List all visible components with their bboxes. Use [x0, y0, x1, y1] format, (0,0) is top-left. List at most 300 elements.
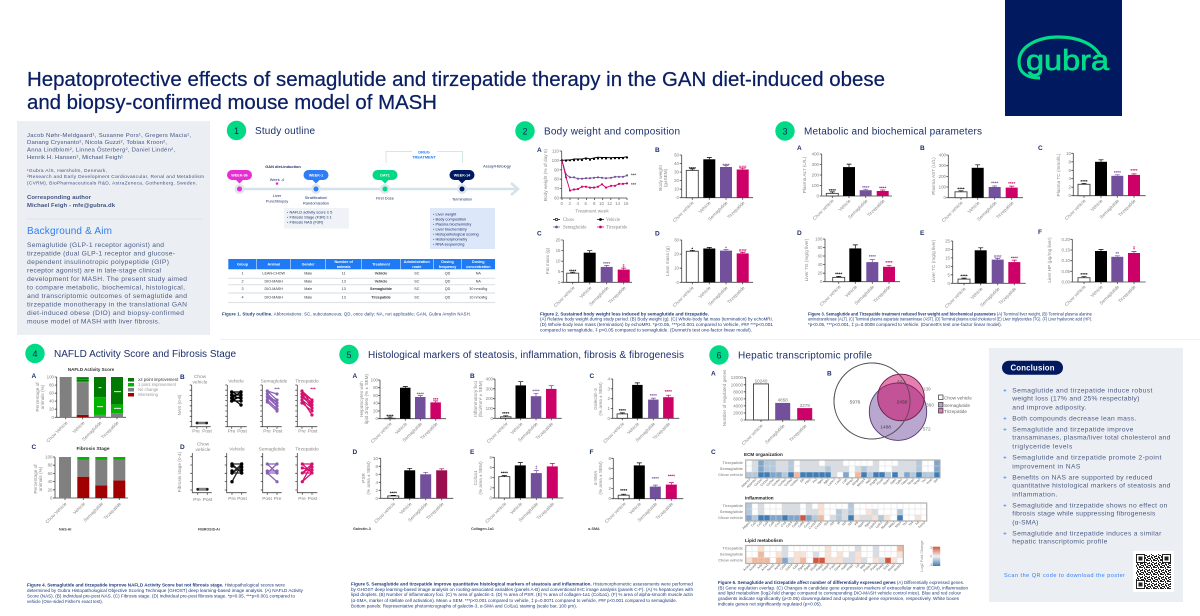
gene labels: Il6 — [836, 520, 841, 526]
table: study groups: Vehicle — [375, 280, 387, 284]
affiliations: ²Research and Early Development Cardiovascular, Renal and Metabolism — [27, 174, 204, 180]
chart 2A: relative body weight line chart: 16 — [624, 201, 629, 206]
logo: gubra — [1005, 0, 1122, 116]
text: background: mouse model of MASH with liver fibrosis. — [27, 318, 160, 326]
badge 2: 2 — [522, 126, 528, 136]
heading: NAFLD: NAFLD Activity Score and Fibrosis Stage — [54, 349, 236, 360]
chart 2C: fat mass: Semaglutide — [588, 285, 610, 307]
chart 3C: plasma TC: 4 — [1069, 176, 1072, 181]
gene labels: Myd88 — [880, 520, 890, 530]
authors: Jacob Nøhr-Meldgaard¹, Susanne Pors¹, Gregers Macia¹, — [27, 133, 191, 139]
chart 3A: plasma ALT: 300 — [812, 162, 820, 167]
chart 5B: inflammatory foci: **** — [532, 388, 540, 394]
chart 5C: galectin-3: Chow vehicle — [602, 421, 626, 444]
caption: figure 5: Bottom panels: Representative photomicrographs of galectin-3, α-SMA and Col1a1 staining (scale bar, 100 μm). — [351, 604, 577, 608]
gene labels: Tnf — [914, 520, 920, 526]
chart 3A: plasma ALT: 0 — [817, 194, 820, 198]
chart 4C: fibrosis stage stacked bars: Semaglutide — [83, 501, 105, 523]
chart 6A: regulated genes: 4000 — [733, 403, 744, 408]
corresponding author: Michael Feigh - mfe@gubra.dk — [27, 203, 116, 209]
conclusion bullets: triglyceride levels — [1012, 443, 1073, 450]
gene labels: Itga1 — [817, 477, 824, 485]
timeline labels: Stratification/ — [305, 195, 328, 200]
conclusion bullets: + — [1003, 530, 1007, 538]
chart 5F: alpha-SMA: α-SMA — [588, 527, 600, 531]
legend: Semaglutide — [563, 226, 586, 230]
gene labels: Ccr2 — [774, 520, 781, 528]
title: Hepatoprotective effects of semaglutide and tirzepatide therapy in the GAN diet-induced obese — [27, 69, 885, 91]
chart 3E: liver TC: Vehicle — [970, 286, 984, 300]
caption: figure 4: Score (NAS). (B) Individual pre-post NAS. (C) Fibrosis stage. (D) Individual pre-post fibrosis stage. *p<0.05, ***p<0.001 compared to — [27, 594, 296, 598]
heatmap: inflammation: Chow vehicle — [718, 515, 744, 520]
chart 2A: relative body weight line chart: 90 — [554, 167, 560, 172]
chart 3C: plasma TC: **** — [1130, 168, 1138, 173]
gene labels: Col1a2 — [759, 477, 769, 487]
table: study groups: Male — [304, 272, 312, 276]
caption: figure 2: (A) Relative body weight during study period. (B) Body weight (g). (C) Whole-body fat mass (termination) by echoMRI. — [540, 317, 773, 322]
timeline labels: First Dose — [376, 196, 394, 200]
chart 5D: PSR: PSR — [361, 473, 366, 483]
chart 2D: lean mass: 0 — [677, 280, 680, 285]
chart 3B: plasma AST: Tirzepatide — [995, 200, 1015, 220]
gene labels: Cpt2 — [792, 563, 799, 570]
gene labels: Il10 — [841, 520, 847, 527]
gene labels: Il18 — [847, 520, 853, 527]
chart 4A: NAFLD activity score stacked bars: animals (%) — [40, 384, 45, 409]
table: study groups: Treatment — [372, 262, 391, 266]
legend — [553, 218, 627, 230]
chart 4D: individual fibrosis stage pre-post: Chow — [197, 442, 210, 448]
chart 6A: regulated genes: 8000 — [733, 389, 744, 394]
chart 5B: inflammatory foci: Inflammatory foci — [473, 381, 478, 417]
chart 3F: liver HP: Vehicle — [1090, 284, 1104, 298]
chart 5C: galectin-3: (% area ± SEM) — [598, 382, 603, 416]
chart 4B: individual NAS pre-post: Vehicle — [228, 378, 244, 384]
chart 5C: galectin-3: Semaglutide — [635, 421, 657, 443]
logo: gubra: gubra — [1026, 45, 1110, 77]
chart 2B: body weight bars: **** — [722, 162, 730, 168]
chart 2A: relative body weight line chart: 8 — [593, 201, 596, 206]
gene labels: Acly — [756, 563, 764, 570]
table: study groups: QD — [445, 272, 451, 276]
gene labels: Thbs1 — [900, 477, 909, 486]
timeline labels: Termination — [452, 196, 472, 202]
heatmap: inflammation: Inflammation — [745, 496, 774, 500]
text: background: Semaglutide (GLP-1 receptor agonist) and — [27, 242, 164, 249]
conclusion bullets: inflammation. — [1012, 491, 1057, 498]
chart 4D: individual fibrosis stage pre-post: Post — [308, 496, 318, 502]
chart 3C: plasma TC: 2 — [1069, 185, 1072, 190]
gene labels: Mttp — [859, 563, 866, 570]
chart 4C: fibrosis stage stacked bars — [32, 444, 128, 532]
chart 4A: NAFLD activity score stacked bars: NAFLD Activity Score — [68, 367, 115, 372]
timeline labels: Assay/Histology — [483, 164, 511, 168]
gene labels: Col3a1 — [765, 477, 775, 487]
chart 6A: regulated genes: 10000 — [731, 382, 744, 387]
chart 3C: plasma TC: **** — [1080, 179, 1088, 184]
badge 6: 6 — [716, 350, 722, 360]
QR code — [1133, 551, 1174, 592]
text: background — [27, 242, 187, 326]
text: background: diet-induced obese (DIO) and biopsy-confirmed — [27, 310, 184, 317]
gene labels: Lpl — [854, 563, 860, 569]
table: study groups: 1 — [241, 272, 244, 276]
chart 6B: venn diagram: 1488 — [880, 424, 891, 430]
chart 3D: liver TG: Tirzepatide — [872, 284, 892, 304]
panel 1: study outline — [222, 121, 518, 316]
caption: figure 5: lipid droplets. (B) Number of inflammatory foci. (C) % area of galectin-3. (D) % area of PSR. (E) % area of collagen-1a1 (Col1a1). (F) % area of alpha-smooth muscle actin — [351, 592, 694, 597]
chart 2A: relative body weight line chart: 70 — [554, 186, 560, 191]
chart 3C: plasma TC: Vehicle — [1090, 198, 1104, 212]
legend: Semaglutide — [944, 403, 970, 408]
gene labels: Cxcl16 — [814, 520, 823, 530]
chart 3B: plasma AST: **** — [1008, 181, 1015, 186]
chart 2A: relative body weight line chart: *** — [631, 182, 636, 187]
chart 4D: individual fibrosis stage pre-post: FIBROSIS-AI — [198, 528, 220, 532]
chart 2C: fat mass: C — [537, 230, 542, 238]
caption: figure 4: Figure 4. Semaglutide and tirzepatide improve NAFLD Activity Score but not fibrosis stage. Histopathological scores were — [27, 582, 286, 588]
chart 5C: galectin-3: **** — [665, 389, 672, 394]
chart 2A: relative body weight line chart: A — [537, 147, 542, 154]
table: study groups: QD — [445, 287, 451, 291]
chart 3D: liver TG — [797, 230, 900, 307]
chart 3A: plasma ALT: **** — [879, 186, 886, 190]
gene labels: Trem2 — [917, 520, 926, 529]
chart 2B: body weight bars: 0 — [677, 195, 680, 200]
chart 3E: liver TC: 20 — [945, 247, 951, 252]
chart 4C: fibrosis stage stacked bars: 40 — [48, 479, 53, 484]
corresponding author: Corresponding author — [27, 195, 92, 201]
caption: figure 6: gradients indicate significantly (p<0.05) downregulated and upregulated gene expression, respectively. White boxes — [718, 596, 959, 601]
gene labels: Adgre1 — [741, 520, 751, 530]
caption: figure 6: (B) Gene regulation overlap. (C) Changes in candidate gene expression markers of extracellular matrix (ECM), inflammation — [718, 585, 969, 590]
conclusion bullets: Semaglutide and tirzepatide promote 2-point — [1012, 454, 1161, 461]
gene labels: Il1b — [829, 520, 835, 527]
chart 5E: Col1a1: Chow vehicle — [484, 501, 508, 524]
gene labels: Col5a1 — [777, 477, 787, 487]
chart 2B: body weight bars: (g±SEM) — [663, 168, 668, 187]
chart 5D: PSR: 0 — [376, 496, 379, 501]
chart 2A: relative body weight line chart: 6 — [585, 201, 588, 206]
chart 6A: regulated genes: 4858 — [778, 398, 788, 402]
chart 2B: body weight bars: 40 — [674, 161, 680, 166]
chart 3B: plasma AST: Plasma AST (U/L) — [931, 157, 936, 195]
conclusion bullets: + — [1003, 388, 1007, 394]
heading: conclusion pill: Conclusion — [1010, 364, 1055, 372]
chart 3D: liver TG: Chow vehicle — [819, 284, 842, 307]
legend: Tirzepatide — [944, 409, 967, 414]
heatmap: ECM organization: Chow vehicle — [718, 472, 744, 477]
chart 4B: individual NAS pre-post: *** — [274, 386, 280, 392]
table: study groups: 10 nmol/kg — [469, 296, 487, 300]
chart 5F: alpha-SMA — [588, 449, 683, 531]
gene labels: Itgax — [864, 520, 872, 528]
table: study groups: 3 — [241, 287, 244, 291]
panel 2: body weight and composition — [515, 121, 774, 332]
chart 3A: plasma ALT: **** — [862, 185, 869, 190]
chart 3F: liver HP: 0.10 — [1061, 258, 1071, 263]
chart 5F: alpha-SMA: F — [590, 449, 594, 456]
chart 5C: galectin-3: Galectin-3 — [593, 388, 598, 410]
gene labels: Ccr5 — [780, 520, 787, 528]
milestone: week 14 — [450, 170, 474, 194]
heatmap: inflammation: Semaglutide — [720, 509, 744, 514]
chart 6A: regulated genes: 12000 — [731, 375, 744, 380]
chart 4D: individual fibrosis stage pre-post: Post — [203, 497, 213, 503]
table: study groups: LEAN-CHOW — [262, 272, 285, 276]
chart 6B: venn diagram: 360 — [926, 402, 934, 408]
panel 4: NAFLD activity score and fibrosis stage — [25, 344, 319, 604]
chart 6A: regulated genes: 3379 — [800, 403, 810, 408]
chart 4B: individual NAS pre-post: vehicle — [193, 380, 208, 386]
milestone: week -36: WEEK-36 — [231, 174, 248, 178]
heatmap: inflammation: Tirzepatide — [723, 503, 744, 508]
chart 3F: liver HP: ‡ — [1133, 246, 1136, 250]
legend: ≥2 point improvement — [138, 377, 179, 382]
box: inclusion criteria: ▪ NAFLD activity score ≥ 5 — [287, 210, 332, 214]
chart 2A: relative body weight line chart: 12 — [607, 201, 613, 206]
chart 3D: liver TG: **** — [869, 254, 876, 259]
chart 2B: body weight bars: B — [655, 147, 660, 154]
authors — [27, 133, 191, 161]
gene labels — [740, 477, 939, 489]
heatmap: lipid metabolism: Chow vehicle — [718, 558, 744, 562]
chart 3E: liver TC: **** — [1011, 256, 1018, 260]
caption: figure 6: indicate genes not significantly regulated (p>0.05). — [718, 601, 822, 606]
chart 4D: individual fibrosis stage pre-post: vehicle — [196, 447, 211, 453]
chart 3E: liver TC: Tirzepatide — [998, 286, 1018, 306]
chart 5B: inflammatory foci: B — [470, 373, 475, 380]
gene labels: Sparc — [882, 477, 891, 486]
chart 2B: body weight bars: 10 — [674, 187, 680, 192]
table: study groups: Semaglutide — [370, 287, 392, 291]
gene labels: Cpt1a — [785, 563, 793, 572]
chart 5B: inflammatory foci: Vehicle — [510, 421, 524, 435]
chart 3B: plasma AST: 100 — [939, 184, 947, 190]
chart 4D: individual fibrosis stage pre-post: Pre — [193, 497, 201, 503]
chart 5F: alpha-SMA: Chow vehicle — [604, 501, 627, 524]
conclusion bullets: Semaglutide and tirzepatide induce robust — [1012, 387, 1152, 394]
chart 5A: hepatocytes with lipid droplets: **** — [386, 414, 394, 418]
chart 5E: Col1a1: ‡ — [535, 465, 538, 470]
chart 3A: plasma ALT — [797, 145, 892, 221]
chart 3D: liver TG: **** — [835, 272, 842, 276]
chart 4B: individual NAS pre-post: B — [180, 374, 185, 381]
heading: body weight: Body weight and composition — [544, 126, 680, 138]
gene labels: Dgat2 — [803, 563, 812, 572]
chart 5D: PSR: Vehicle — [399, 501, 413, 515]
chart 4D: individual fibrosis stage pre-post: Pre — [274, 496, 282, 502]
chart 3E: liver TC: Chow vehicle — [944, 286, 967, 309]
heatmap: lipid metabolism: Lipid metabolism — [745, 538, 783, 543]
chart 5A: hepatocytes with lipid droplets: lipid droplets (% ± SEM) — [364, 373, 369, 424]
gene labels — [742, 563, 902, 573]
timeline labels: GAN diet-induction — [265, 164, 301, 169]
gene labels: Pdgfrb — [869, 477, 878, 487]
chart 4A: NAFLD activity score stacked bars: 0 — [52, 415, 55, 420]
chart 5C: galectin-3: 3 — [608, 386, 611, 391]
chart 5C: galectin-3: 1 — [608, 406, 611, 411]
conclusion bullets: Semaglutide and tirzepatide improve — [1012, 426, 1134, 433]
chart 5B: inflammatory foci: Chow vehicle — [486, 421, 509, 444]
caption: figure 3: Figure 3. Semaglutide and Tirzepatide treatment reduced liver weight and biochemical parameters (A) Terminal liver weight, (B) Terminal plasma alanine — [808, 312, 1093, 316]
chart 3B: plasma AST: Chow vehicle — [941, 200, 964, 223]
caption: figure 4: vehicle (One-sided Fisher's exact test). — [27, 599, 103, 604]
gene labels: Col6a1 — [789, 477, 799, 487]
milestone: day 1 — [372, 170, 398, 194]
table: study groups: SC — [414, 296, 420, 300]
panel 6: hepatic transcriptomic profile — [709, 345, 972, 606]
chart 5D: PSR — [352, 449, 453, 531]
chart 2D: lean mass: Tirzepatide — [726, 285, 746, 305]
table: study groups: DIO-MASH — [264, 280, 283, 284]
chart 4B: individual NAS pre-post: Tirzepatide — [295, 378, 319, 384]
gene labels: Mmp2 — [845, 477, 854, 486]
legend — [128, 377, 179, 397]
chart 5A: hepatocytes with lipid droplets: Tirzepatide — [419, 421, 439, 441]
chart 3F: liver HP: 0.05 — [1061, 269, 1071, 274]
gene labels: Col5a2 — [783, 477, 793, 487]
chart 3B: plasma AST: 400 — [939, 152, 947, 158]
chart 4D: individual fibrosis stage pre-post: Semaglutide — [259, 446, 286, 452]
chart 6A: regulated genes — [711, 369, 815, 446]
gene labels: Cd14 — [785, 520, 793, 528]
chart 3E: liver TC — [920, 230, 1026, 309]
chart 5F: alpha-SMA: 8 — [609, 456, 612, 461]
chart 5C: galectin-3: Vehicle — [626, 421, 641, 435]
scan note: Scan the QR code to download the poster — [1004, 573, 1125, 579]
chart 3C: plasma TC: 0 — [1069, 193, 1072, 198]
gene labels: Mmp9 — [851, 477, 860, 486]
chart 4D: individual fibrosis stage pre-post: Vehicle — [229, 446, 245, 452]
chart 5D: PSR: (% area ± SEM) — [366, 461, 371, 495]
table: study groups: concentration — [466, 265, 491, 269]
gene labels: Vcan — [925, 477, 933, 485]
affiliations — [27, 168, 204, 186]
table: study groups: SC — [414, 280, 420, 284]
chart 5D: PSR: Chow vehicle — [373, 501, 397, 524]
chart 3A: plasma ALT: A — [797, 145, 802, 152]
chart 2D: lean mass: 20 — [674, 252, 680, 257]
table: study groups: Gender — [302, 262, 315, 266]
chart 3D: liver TG: 80 — [818, 245, 823, 250]
box: endpoints: ▪ Plasma biochemistry — [433, 222, 471, 226]
drug treatment bracket — [386, 150, 462, 163]
chart 3F: liver HP: 0.15 — [1061, 248, 1071, 252]
corresponding author — [27, 195, 116, 209]
caption: figure 6: and lipid metabolism (log2-fold change compared to corresponding DIO-MASH vehicle control mice). Blue and red colour — [718, 590, 962, 596]
chart 4A: NAFLD activity score stacked bars: 60 — [49, 391, 55, 396]
chart 3F: liver HP: Semaglutide — [1099, 284, 1121, 306]
chart 5C: galectin-3: **** — [650, 393, 657, 398]
gene labels: Vim — [933, 477, 939, 484]
chart 4C: fibrosis stage stacked bars: animals (%) — [38, 466, 43, 491]
chart 5B: inflammatory foci: Semaglutide — [517, 421, 539, 443]
chart 5B: inflammatory foci — [470, 373, 562, 444]
box: inclusion criteria: ▪ Fibrosis NAS (F3R) — [287, 220, 324, 224]
legend: Tirzepatide — [606, 226, 627, 230]
chart 4B: individual NAS pre-post — [177, 374, 319, 434]
chart 3E: liver TC: **** — [960, 274, 968, 278]
gene labels: Ccl2 — [750, 520, 757, 528]
chart 3C: plasma TC — [1038, 145, 1146, 221]
table: study groups: 11 — [342, 272, 346, 276]
gene labels: Cd36 — [779, 563, 787, 571]
chart 2A: relative body weight line chart: 10 — [599, 201, 605, 206]
gene labels: Fasn — [829, 563, 836, 571]
table: study groups: SC — [414, 272, 420, 276]
legend: Vehicle — [606, 218, 620, 223]
caption: figure 5: (α-SMA, marker of stellate cell activation). Mean ± SEM. ***p<0.001 compared to vehicle, ‡ p=0.0071 compared to vehicle, ### p<0.001 compared to semaglutide. — [351, 598, 677, 603]
legend: Chow vehicle — [944, 395, 972, 400]
milestone: week -36 — [227, 170, 252, 194]
table: study groups: 2 — [241, 280, 244, 284]
chart 2B: body weight bars: 20 — [674, 178, 680, 183]
box: endpoints: ▪ Histomorphometry — [433, 236, 467, 242]
chart 3B: plasma AST: 300 — [939, 163, 947, 168]
chart 2D: lean mass: * — [691, 246, 693, 252]
chart 5E: Col1a1: Tirzepatide — [536, 501, 556, 521]
chart 6B: venn diagram: 2430 — [897, 400, 908, 406]
chart 5A: hepatocytes with lipid droplets: A — [352, 373, 358, 380]
chart 5B: inflammatory foci: 0 — [491, 416, 494, 421]
panel 3: metabolic and biochemical parameters — [775, 121, 1146, 327]
chart 5F: alpha-SMA: Tirzepatide — [655, 501, 675, 521]
chart 2A: relative body weight line chart: 14 — [615, 201, 621, 206]
box: endpoints: ▪ Histopathological scoring — [433, 232, 479, 236]
gene labels: Fabp1 — [815, 563, 824, 572]
chart 3E: liver TC: 25 — [945, 238, 951, 244]
gene labels: Pparg — [876, 563, 884, 572]
caption: figure 1: Figure 1. Study outline. Abbreviations: SC, subcutaneous; QD, once daily; NA, not applicable; GAN, Gubra Amylin NASH. — [222, 312, 471, 316]
conclusion bullets: hepatic transcriptomic profile — [1012, 539, 1108, 546]
text: background: tirzepatide monotherapy in the translational GAN — [27, 302, 187, 308]
table: study groups: SC — [414, 287, 420, 291]
chart 4C: fibrosis stage stacked bars: NAS-AI — [59, 528, 71, 532]
gene labels: Fn1 — [812, 477, 818, 484]
gene labels: Apoa1 — [766, 563, 775, 572]
caption: figure 4 — [27, 582, 304, 604]
chart 3B: plasma AST: Vehicle — [967, 200, 981, 214]
chart 3F: liver HP — [1038, 229, 1146, 307]
chart 5A: hepatocytes with lipid droplets: Semaglutide — [402, 421, 424, 443]
table: study groups: DIO-MASH — [264, 296, 283, 300]
chart 3A: plasma ALT: 200 — [812, 172, 820, 178]
gene labels: Ccl5 — [768, 520, 775, 528]
chart 2C: fat mass: Fat mass (g) — [545, 247, 550, 274]
caption: figure 2: compared to semaglutide, ‡ p<0.05 compared to semaglutide. (Dunnett's test one-factor linear model). — [540, 327, 752, 332]
chart 4B: individual NAS pre-post: Post — [202, 428, 212, 434]
chart 5E: Col1a1: Collagen-1a1 — [471, 527, 494, 531]
conclusion bullets: Benefits on NAS are supported by reduced — [1012, 474, 1153, 481]
milestone: week -1 — [304, 170, 329, 194]
chart 5D: PSR: 8 — [376, 464, 379, 469]
gene labels: Nlrp3 — [894, 520, 902, 528]
chart 3F: liver HP: **** — [1080, 272, 1088, 277]
heading: background and aim: Background & Aim — [27, 226, 112, 237]
chart 2D: lean mass: * — [725, 246, 727, 250]
chart 3B: plasma AST: 200 — [939, 174, 947, 179]
chart 4B: individual NAS pre-post: Post — [273, 428, 283, 434]
table: study groups: animals — [337, 265, 351, 269]
chart 5F: alpha-SMA: 6 — [609, 466, 612, 471]
chart 5C: galectin-3: 4 — [608, 376, 611, 382]
chart 6A: regulated genes: Semaglutide — [764, 423, 786, 445]
chart 4B: individual NAS pre-post: Chow — [194, 374, 207, 380]
chart 4D: individual fibrosis stage pre-post: Post — [262, 496, 272, 502]
chart 5B: inflammatory foci: (foci/mm² ± SEM) — [478, 380, 483, 417]
gene labels: Loxl1 — [834, 477, 842, 485]
